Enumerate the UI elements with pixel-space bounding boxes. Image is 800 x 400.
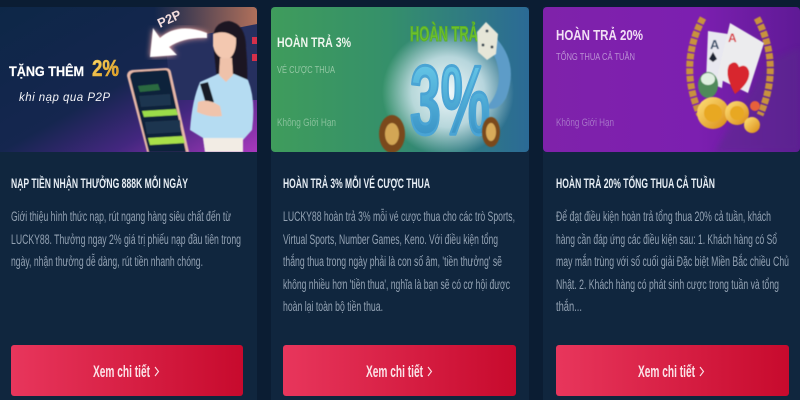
panel: P2P deposit card xyxy=(0,7,257,400)
button: xem chi tiết xyxy=(556,345,789,396)
heading: nạp tiền: NẠP TIỀN NHẬN THƯỞNG 888K MỖI NGÀY xyxy=(11,176,188,191)
body text: hoàn trả 3%: thắng thua trong ngày phải là con số âm, 'tiền thưởng' sẽ xyxy=(283,254,502,269)
body text: nạp tiền xyxy=(11,209,241,269)
body text: nạp tiền: Giới thiệu hình thức nạp, rút ngang hàng siêu chất đến từ xyxy=(11,209,231,224)
icon: playing cards: A xyxy=(710,37,720,52)
text: tổng thua cả tuần: TỔNG THUA CẢ TUẦN xyxy=(556,50,635,63)
icon: dice xyxy=(477,22,498,60)
button: xem chi tiết: Xem chi tiết xyxy=(366,363,423,381)
icon: P2P arrow: P2P xyxy=(155,7,184,31)
icon: laurel wreath xyxy=(690,18,770,115)
body text: hoàn trả 3%: Virtual Sports, Number Games, Keno. Với điều kiện tổng xyxy=(283,232,498,247)
body text: hoàn trả 3%: hoàn lại toàn bộ tiền thua. xyxy=(283,299,383,314)
icon: phone xyxy=(127,68,189,152)
text: không giới hạn: Không Giới Hạn xyxy=(277,117,336,129)
icon: playing cards: A xyxy=(728,31,737,45)
body text: hoàn trả 3%: LUCKY88 hoàn trả 3% mỗi vé cược thua cho các trò Sports, xyxy=(283,209,515,224)
button: xem chi tiết xyxy=(11,345,243,396)
body text: nạp tiền: ngày, nhận thưởng dễ dàng, rút tiền nhanh chóng. xyxy=(11,254,203,269)
body text: hoàn trả 20% xyxy=(556,209,789,314)
banner: hoàn trả 3% xyxy=(271,7,529,156)
body text: hoàn trả 20%: thắn... xyxy=(556,299,582,314)
text: không giới hạn: Không Giới Hạn xyxy=(556,117,614,129)
body text: hoàn trả 3%: không nhiều hơn 'tiền thua', nghĩa là bạn sẽ có cơ hội được xyxy=(283,277,510,292)
icon: blue ring xyxy=(488,40,512,110)
panel: 20% weekly cashback card xyxy=(543,7,800,400)
icon: woman with phone xyxy=(190,21,253,152)
text: vé cược thua: VÉ CƯỢC THUA xyxy=(277,63,335,76)
button: xem chi tiết: Xem chi tiết xyxy=(93,363,150,381)
text: large hoàn trả: HOÀN TRẢ xyxy=(410,23,478,46)
text: large 3%: 3% xyxy=(410,45,490,155)
panel: 3% cashback card xyxy=(271,7,529,400)
text: hoàn trả 3%: HOÀN TRẢ 3% xyxy=(277,35,351,50)
icon: playing cards xyxy=(706,23,764,94)
text: khi nạp qua P2P: khi nạp qua P2P xyxy=(19,92,110,104)
icon: P2P arrow xyxy=(150,7,207,57)
text: tặng thêm: TẶNG THÊM xyxy=(9,62,84,79)
body text: nạp tiền: LUCKY88. Thưởng ngay 2% giá trị phiếu nạp đầu tiên trong xyxy=(11,232,241,247)
icon: gold coins xyxy=(697,97,760,133)
heading: hoàn trả 20%: HOÀN TRẢ 20% TỔNG THUA CẢ TUẦN xyxy=(556,176,715,191)
button: xem chi tiết: Xem chi tiết xyxy=(638,363,695,381)
button: xem chi tiết xyxy=(283,345,516,396)
text: 2%: 2% xyxy=(92,55,119,81)
icon: casino chip left xyxy=(379,115,405,153)
banner: tặng thêm 2% xyxy=(0,7,257,152)
icon: casino chip right xyxy=(482,117,500,147)
text: hoàn trả 20%: HOÀN TRẢ 20% xyxy=(556,27,643,44)
heading: hoàn trả 3%: HOÀN TRẢ 3% MỖI VÉ CƯỢC THUA xyxy=(283,176,430,191)
body text: hoàn trả 3% xyxy=(283,209,515,314)
banner: hoàn trả 20% xyxy=(543,7,800,152)
icon: green chip stack xyxy=(698,72,718,98)
